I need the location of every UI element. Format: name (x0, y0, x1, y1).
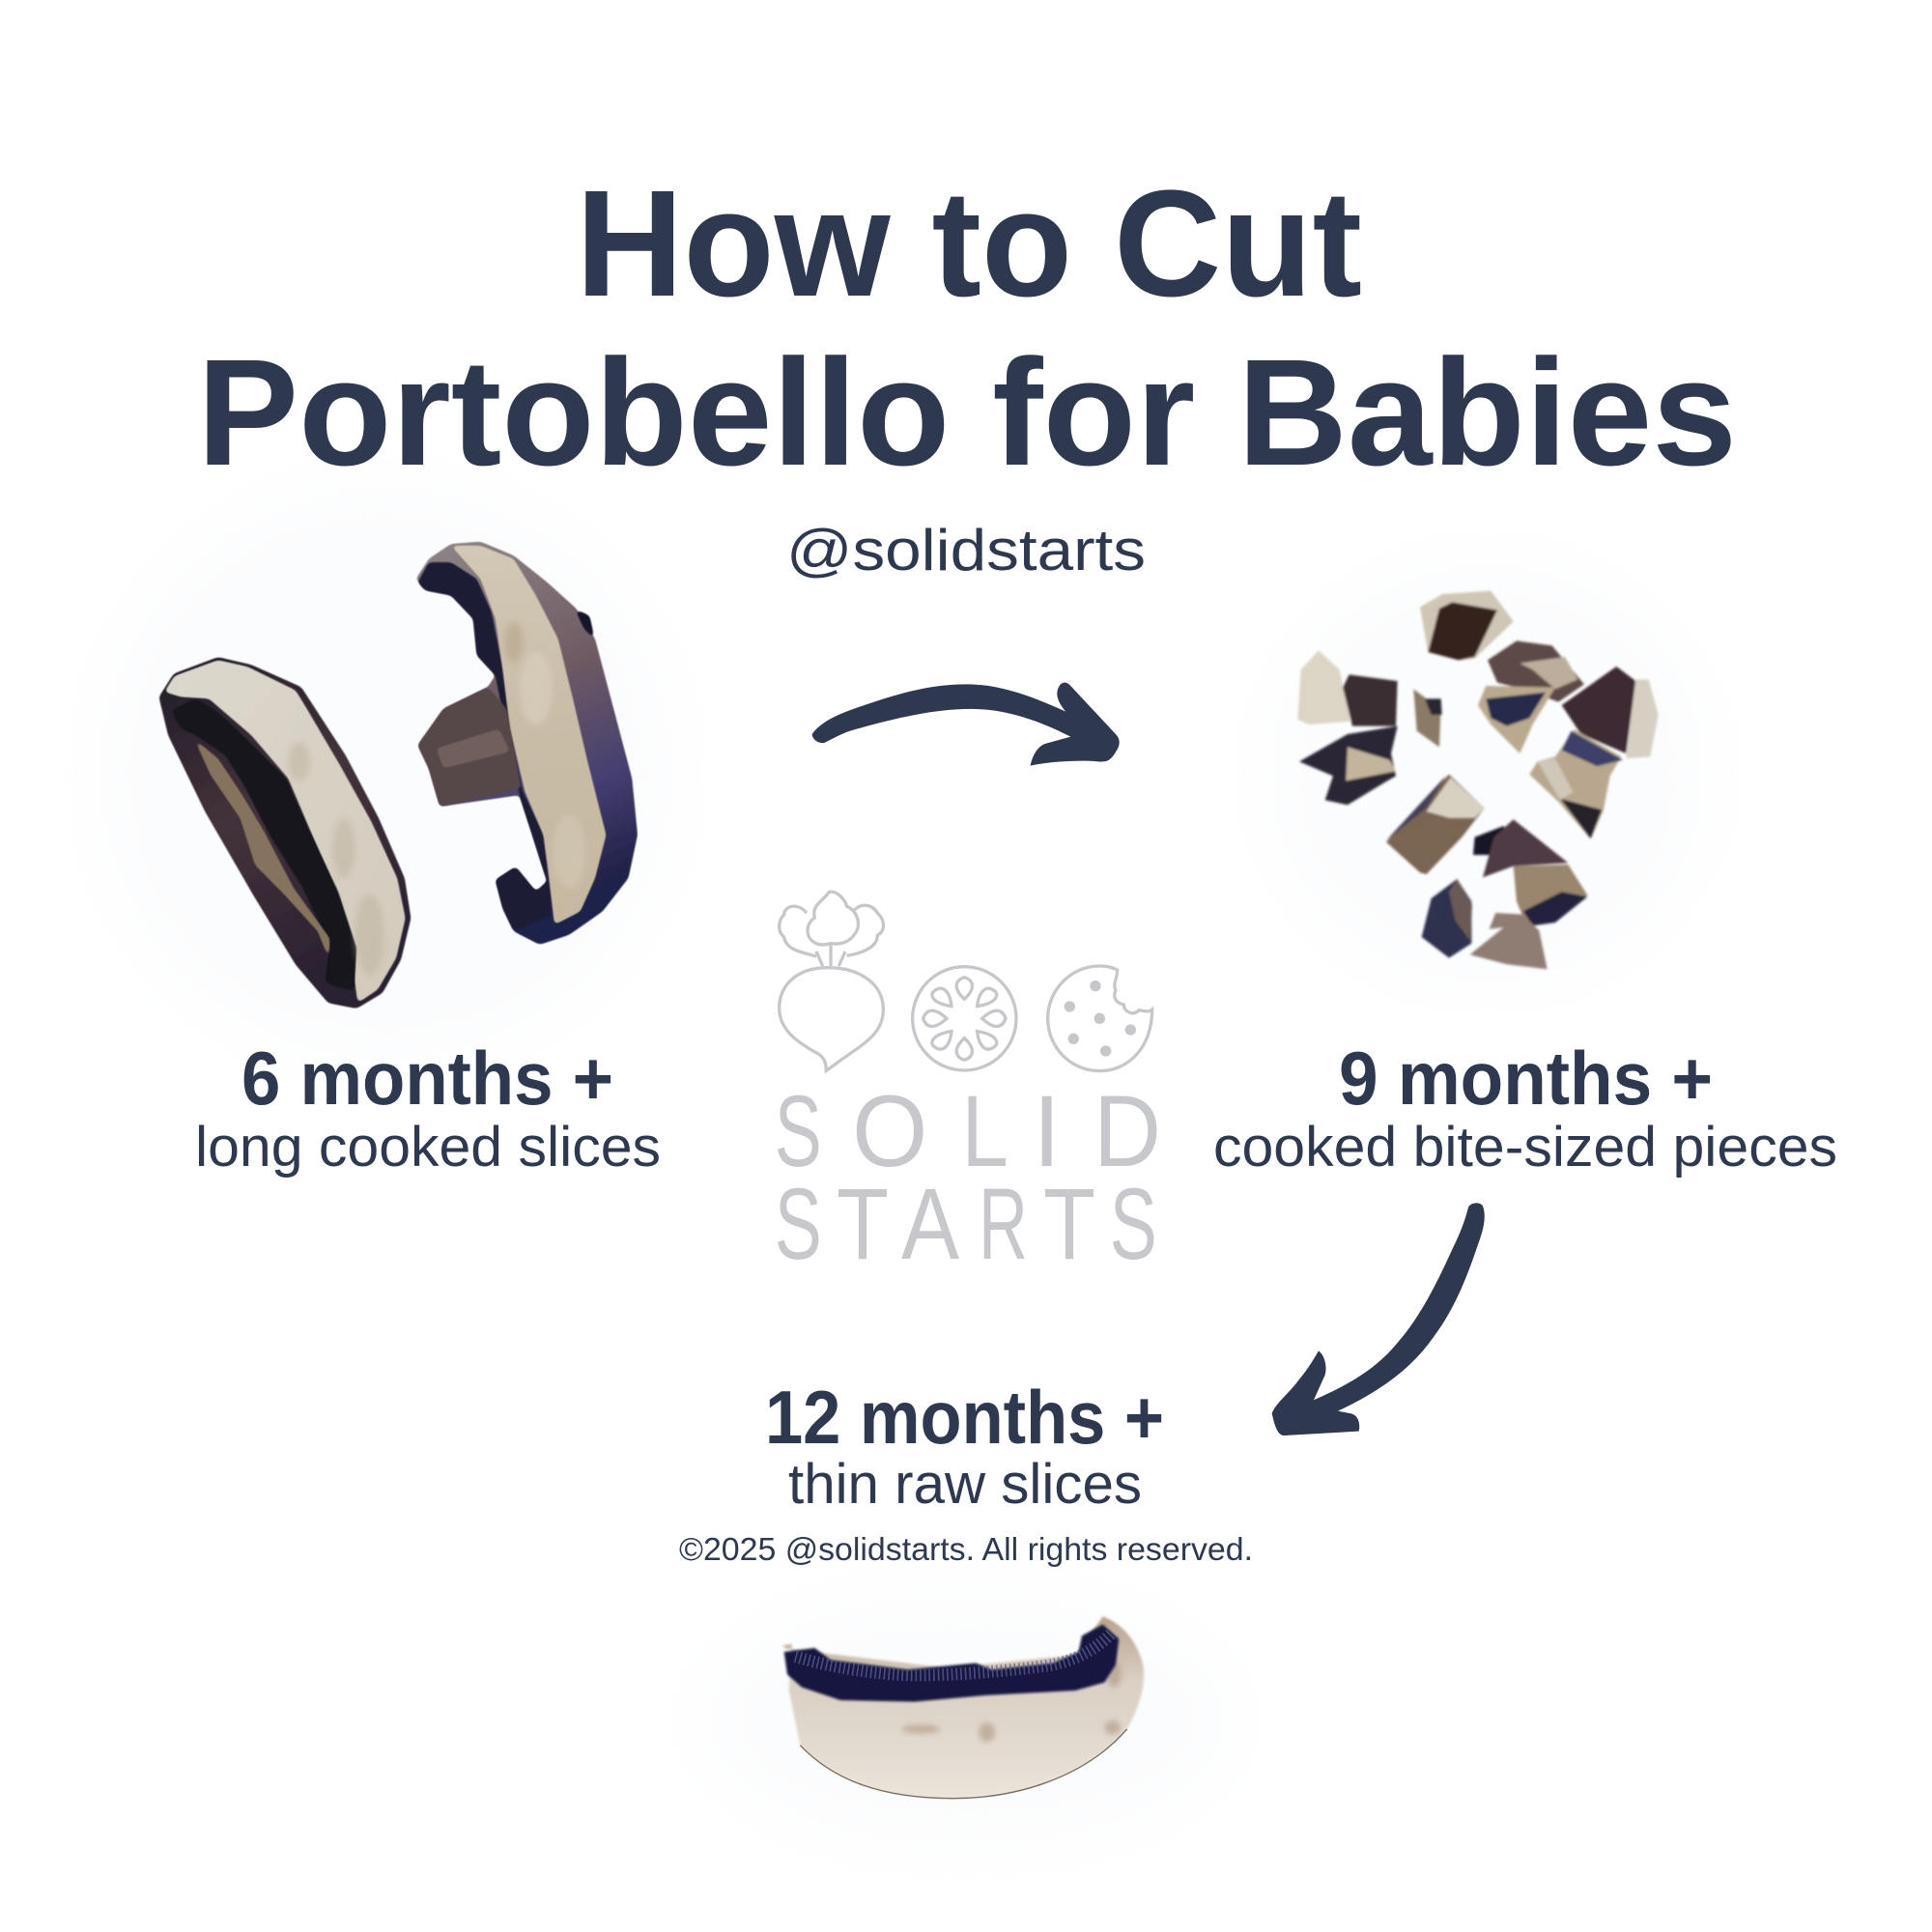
chunk 3 dark (1486, 693, 1546, 726)
photo: bite-sized pieces (1297, 591, 1659, 969)
background glow (97, 483, 1710, 1845)
chunk 10 edge (1386, 776, 1446, 840)
logo wordmark: D (1094, 1075, 1161, 1188)
copyright: ©2025 @solidstarts. All rights reserved. (679, 1531, 1253, 1567)
chunk 13 (1514, 865, 1587, 924)
chunk 1 dark (1428, 602, 1497, 660)
logo wordmark: O (852, 1075, 927, 1188)
chunk 10 light (1427, 778, 1485, 818)
photo: long cooked slices (158, 542, 638, 1009)
chunk 9 dark (1425, 698, 1442, 715)
chunk 11 (1473, 826, 1507, 855)
chunk 13 dark (1523, 892, 1587, 925)
slice stains (901, 1662, 1122, 1742)
chunk 2 light (1520, 657, 1577, 689)
logo wordmark (775, 1075, 1161, 1281)
right slice mottling (504, 622, 585, 889)
icon: vegetable slice (913, 967, 1016, 1070)
label: 9 months: cooked bite-sized pieces (1213, 1116, 1837, 1179)
label: 6 months (195, 1036, 661, 1179)
label: 12 months: thin raw slices (788, 1453, 1142, 1516)
chunk 14 (1422, 879, 1471, 958)
slice lower edge (800, 1729, 1127, 1799)
chunk 12 (1483, 819, 1568, 877)
chunk 5 (1529, 729, 1621, 838)
chunk 15 (1470, 913, 1548, 969)
icon: cookie (1048, 966, 1152, 1071)
label: 12 months: 12 months + (765, 1375, 1164, 1460)
chunk 4 (1562, 667, 1635, 753)
logo wordmark: A (901, 1168, 959, 1281)
chunk 8 (1299, 726, 1398, 805)
label: 9 months (1213, 1036, 1837, 1179)
left slice (158, 657, 411, 1009)
title (197, 159, 1737, 497)
label: 6 months: 6 months + (242, 1036, 613, 1121)
logo icons (780, 892, 1152, 1071)
chunk 3 (1478, 686, 1555, 753)
right slice (415, 542, 638, 945)
slice gill highlights (795, 1634, 1111, 1675)
logo wordmark: S (775, 1075, 822, 1188)
title: How to Cut (576, 159, 1362, 328)
chunk 4 light (1626, 679, 1659, 758)
arrow: pieces to raw slices (1272, 1203, 1485, 1435)
logo wordmark: T (837, 1168, 889, 1281)
left slice mottling (288, 742, 384, 975)
logo wordmark: L (961, 1075, 1009, 1188)
chunk 9 (1413, 689, 1441, 747)
label: 9 months: 9 months + (1339, 1036, 1713, 1121)
logo wordmark: I (1033, 1075, 1061, 1188)
chunk 6 (1297, 650, 1350, 724)
chunk 2 (1488, 640, 1584, 702)
logo wordmark: R (979, 1168, 1028, 1281)
label: 12 months (765, 1375, 1164, 1516)
chunk 8 light (1346, 747, 1396, 781)
chunk 1 (1420, 591, 1514, 660)
title: Portobello for Babies (197, 328, 1737, 497)
logo wordmark: S (1110, 1168, 1157, 1281)
label: 6 months: long cooked slices (195, 1116, 661, 1179)
logo wordmark: S (775, 1168, 822, 1281)
logo (195, 892, 1837, 1799)
slice gills (784, 1625, 1119, 1702)
arrow: slices to pieces (812, 683, 1120, 766)
logo wordmark: T (1043, 1168, 1095, 1281)
chunk 7 (1343, 674, 1398, 726)
chunk 10 (1386, 775, 1485, 874)
chunk 5 dark (1562, 731, 1623, 766)
chunk 14 brown (1449, 879, 1472, 940)
handle: @solidstarts (786, 518, 1146, 582)
chunk 5 bottom (1560, 799, 1602, 838)
chunk 5 pale (1538, 758, 1573, 800)
slice flesh (782, 1616, 1144, 1799)
icon: beet (780, 892, 884, 1070)
photo: thin raw slice (782, 1616, 1144, 1799)
